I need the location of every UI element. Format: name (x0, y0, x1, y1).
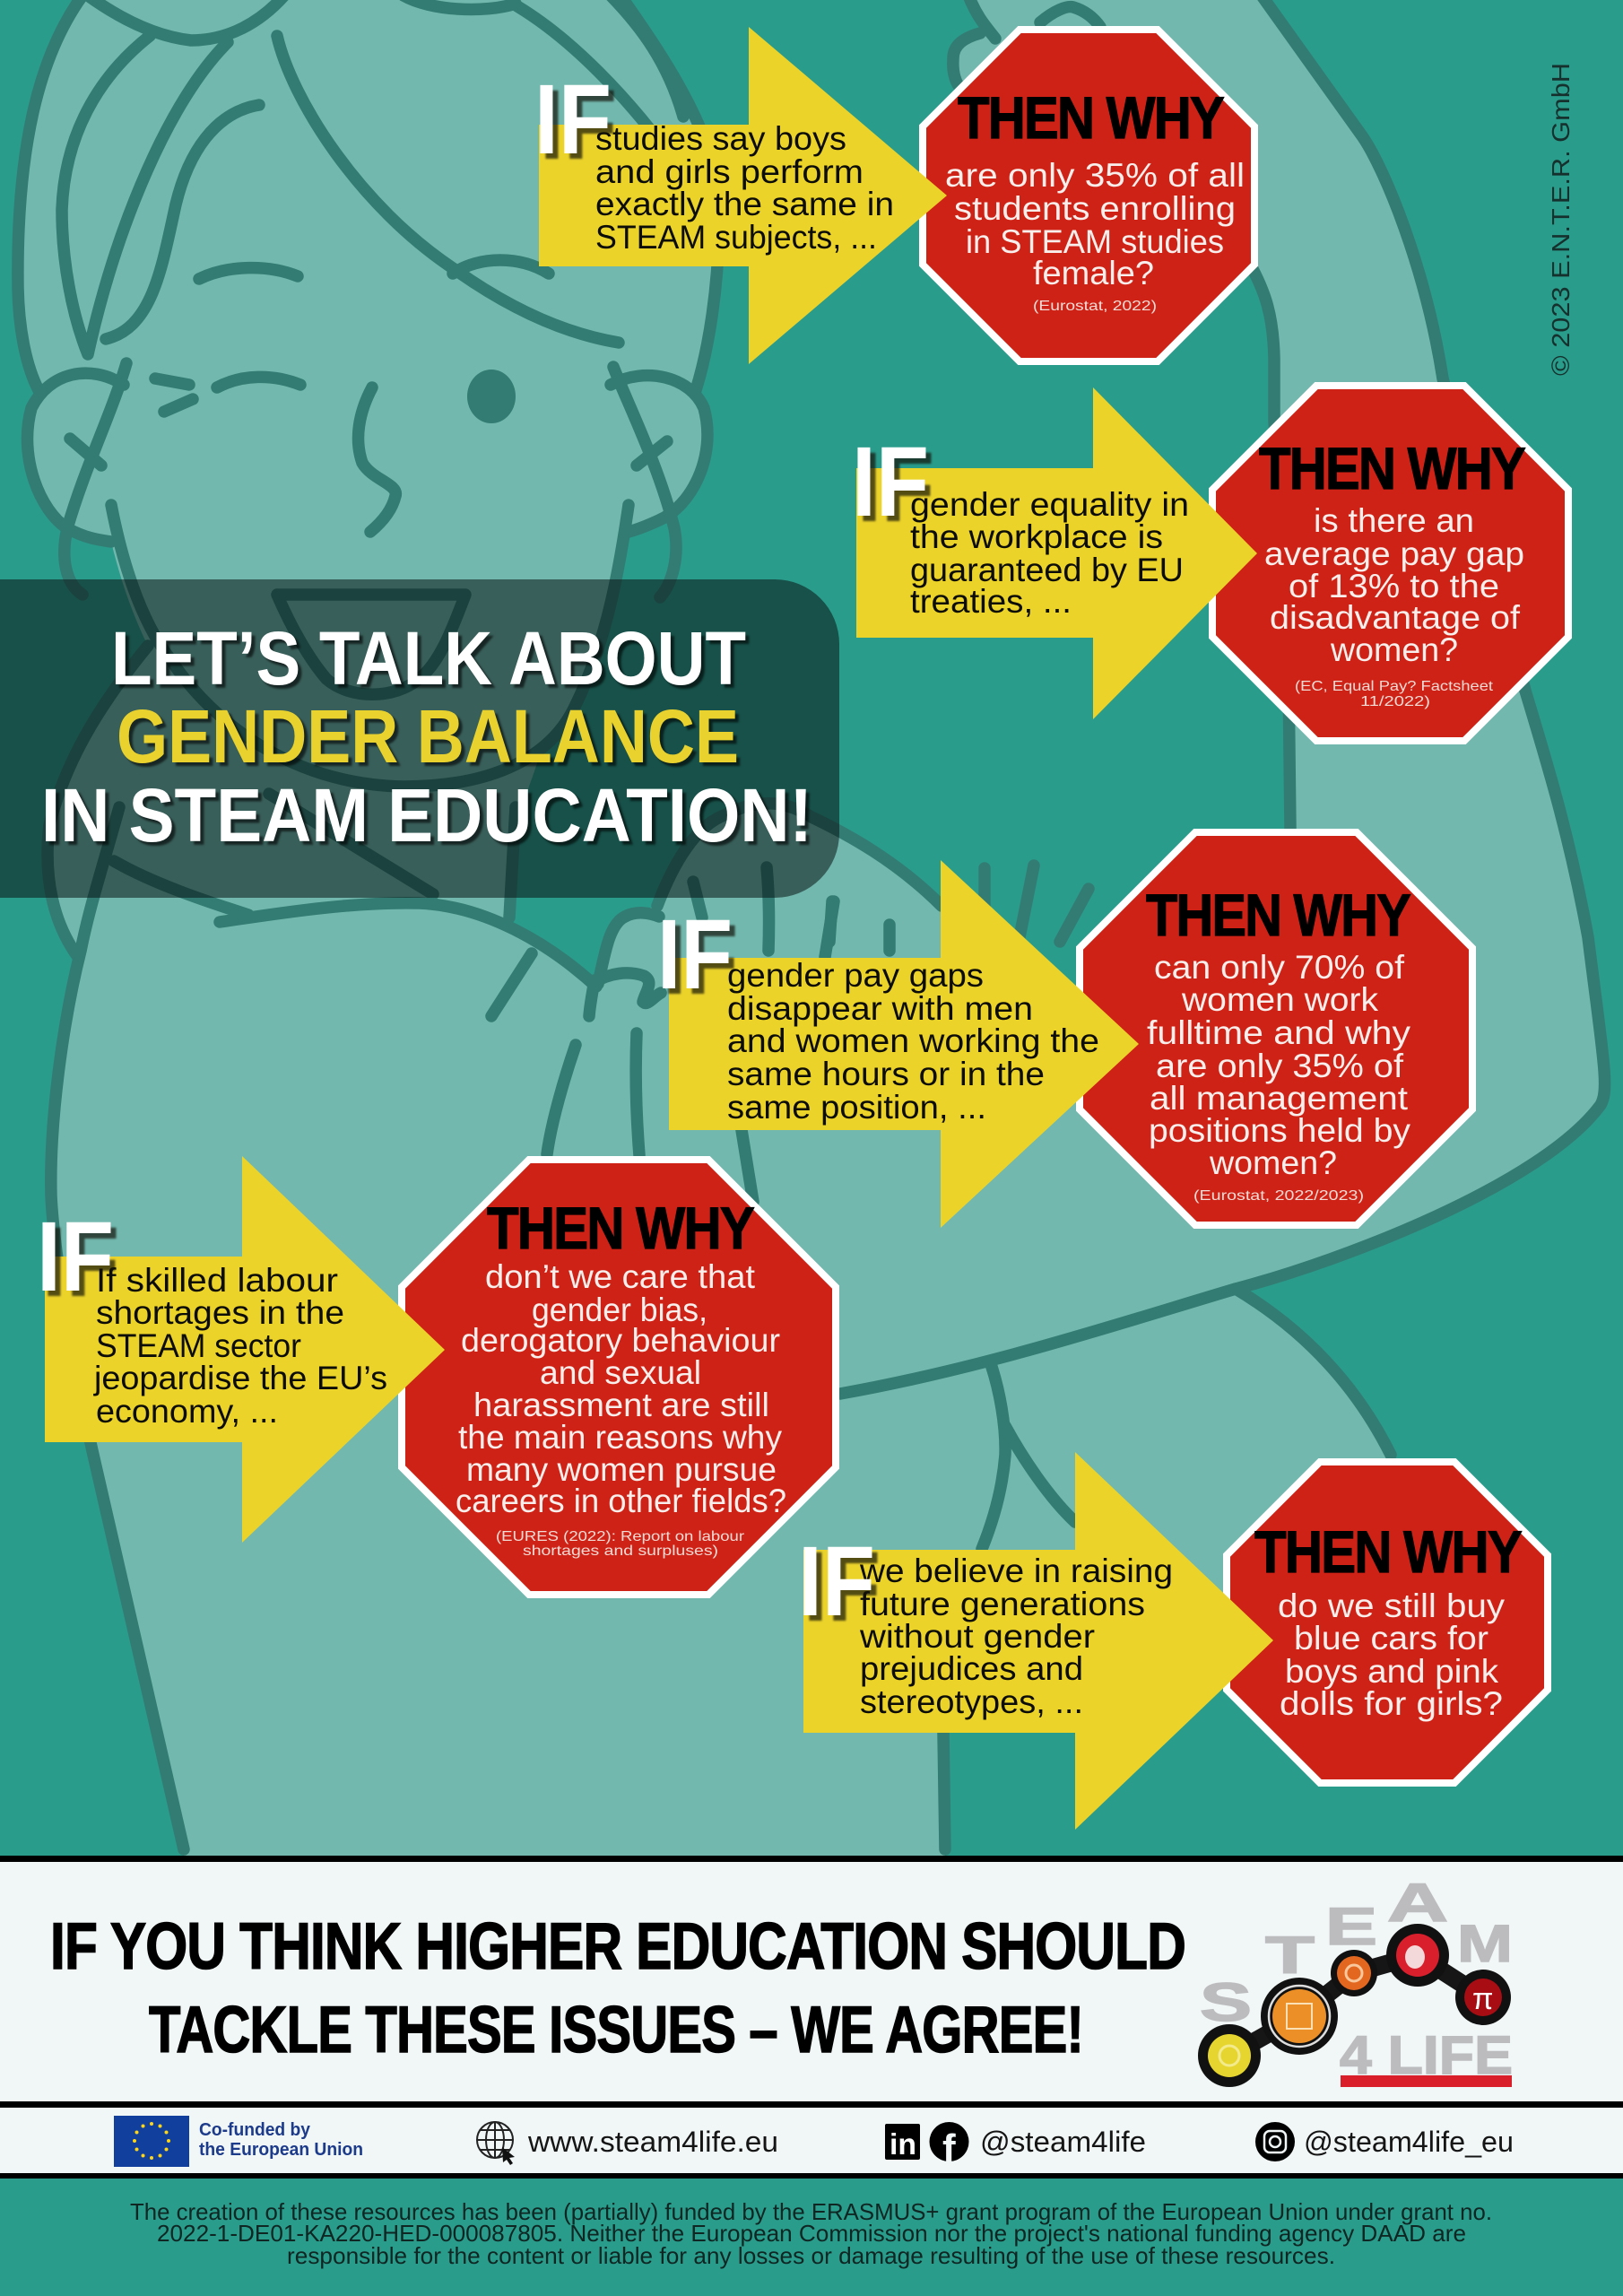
stop sign 3: are only 35% of (1156, 1048, 1404, 1084)
arrow 4: If skilled labour (96, 1262, 338, 1299)
stop sign 5 (1227, 1462, 1548, 1783)
arrow 1: studies say boys (595, 120, 846, 157)
arrow 3: IF (657, 900, 733, 1010)
title text: GENDER BALANCE (117, 694, 739, 778)
website link with globe icon (477, 2122, 778, 2165)
stop sign 3: can only 70% of (1154, 949, 1405, 986)
arrow 3: same position, ... (727, 1089, 986, 1126)
arrow 4: economy, ... (96, 1393, 278, 1430)
arrow 3: disappear with men (727, 990, 1033, 1027)
arrow 2 (852, 387, 1257, 719)
arrow 5: without gender (859, 1618, 1095, 1655)
EU co-funding badge: the European Union (199, 2140, 363, 2160)
EU co-funding badge: Co-funded by (199, 2120, 311, 2140)
stop sign 4: careers in other fields? (456, 1483, 786, 1519)
stop sign 3: fulltime and why (1147, 1014, 1411, 1051)
title text: LET’S TALK ABOUT (111, 616, 746, 700)
stop sign 1: in STEAM studies (966, 223, 1224, 260)
funding disclaimer: The creation of these resources has been (partially) funded by the ERASMUS+ grant program of the European Union under grant no. (130, 2198, 1492, 2225)
logo: STEAM 4 LIFE: S (1200, 1972, 1252, 2032)
stop sign 4: many women pursue (466, 1451, 777, 1488)
call to action text: IF YOU THINK HIGHER EDUCATION SHOULD (50, 1910, 1185, 1983)
stop sign 2: 11/2022) (1360, 694, 1430, 709)
arrow 5 (798, 1452, 1273, 1830)
arrow 5: prejudices and (860, 1650, 1083, 1687)
arrow 3: and women working the (727, 1022, 1099, 1059)
stop sign 5: do we still buy (1278, 1587, 1506, 1624)
stop sign 3: all management (1150, 1080, 1409, 1117)
arrow 4: jeopardise the EU’s (93, 1360, 387, 1396)
stop sign 1: (Eurostat, 2022) (1033, 299, 1157, 314)
stop sign 3: women? (1209, 1144, 1337, 1181)
arrow 2: treaties, ... (910, 583, 1072, 620)
arrow 3 (657, 860, 1139, 1228)
arrow 2: gender equality in (910, 486, 1189, 523)
logo: STEAM 4 LIFE: A (1387, 1873, 1448, 1933)
stop sign 2 (1212, 386, 1568, 741)
arrow 2: guaranteed by EU (910, 552, 1184, 588)
funding disclaimer: 2022-1-DE01-KA220-HED-000087805. Neither the European Commission nor the project's national funding agency DAAD are (157, 2220, 1466, 2247)
call to action text (50, 1910, 1185, 2066)
stop sign 4 (402, 1160, 836, 1595)
hair and head outlines (18, 0, 719, 787)
stop sign 1: are only 35% of all (945, 157, 1245, 194)
stop sign 2: THEN WHY (1259, 435, 1525, 501)
arrow 1: IF (534, 65, 612, 175)
stop sign 4: THEN WHY (487, 1195, 754, 1261)
logo: STEAM 4 LIFE: T (1265, 1926, 1315, 1985)
arrow 1: STEAM subjects, ... (595, 219, 877, 256)
arrow 4: STEAM sector (96, 1327, 301, 1364)
stop sign 4: (EURES (2022): Report on labour (496, 1529, 745, 1544)
arrow 4 (37, 1156, 445, 1543)
website link with globe icon: www.steam4life.eu (527, 2126, 778, 2158)
arrow 5: future generations (860, 1586, 1145, 1622)
stop sign 2: average pay gap (1264, 535, 1524, 572)
statement 2 (852, 386, 1568, 741)
face (155, 260, 549, 694)
funding disclaimer: responsible for the content or liable for any losses or damage resulting of the use of these resources. (287, 2242, 1335, 2269)
arrow 3: gender pay gaps (727, 957, 984, 994)
logo: STEAM 4 LIFE: M (1457, 1915, 1513, 1973)
stop sign 2: (EC, Equal Pay? Factsheet (1295, 679, 1494, 694)
illustration: woman flexing her arm (18, 0, 1605, 1856)
stop sign 2: of 13% to the (1289, 568, 1499, 604)
social: LinkedIn and Facebook (885, 2122, 1146, 2170)
stop sign 5: blue cars for (1294, 1620, 1488, 1657)
statement 4 (37, 1156, 836, 1595)
arrow 4: shortages in the (96, 1294, 344, 1331)
logo: STEAM 4 LIFE: π (1472, 1982, 1493, 2016)
logo: STEAM 4 LIFE: E (1325, 1898, 1377, 1956)
arrow 1 (534, 27, 947, 364)
stop sign 4: and sexual (540, 1354, 701, 1391)
call to action panel (0, 1856, 1623, 2179)
social: LinkedIn and Facebook: in (890, 2127, 916, 2161)
EU co-funding badge (114, 2116, 363, 2167)
arrow 5: we believe in raising (859, 1552, 1173, 1589)
title text: IN STEAM EDUCATION! (41, 773, 812, 857)
arrow 1: exactly the same in (595, 186, 894, 222)
stop sign 2: disadvantage of (1270, 599, 1521, 636)
statement 3 (657, 832, 1472, 1228)
social: LinkedIn and Facebook: @steam4life (980, 2126, 1146, 2158)
stop sign 1: female? (1033, 255, 1154, 291)
stop sign 5: THEN WHY (1254, 1518, 1522, 1585)
arrow 2: the workplace is (910, 518, 1163, 555)
social: Instagram: @steam4life_eu (1304, 2126, 1514, 2158)
funding disclaimer (130, 2198, 1492, 2269)
stop sign 4: harassment are still (473, 1387, 769, 1423)
stop sign 4: derogatory behaviour (461, 1322, 780, 1359)
stop sign 1: students enrolling (954, 190, 1236, 227)
stop sign 1: THEN WHY (958, 84, 1224, 151)
stop sign 4: shortages and surpluses) (523, 1544, 718, 1559)
title text (41, 616, 812, 857)
statement 5 (798, 1452, 1548, 1830)
logo: STEAM 4 LIFE: 4 LIFE (1340, 2025, 1513, 2085)
arrow 5: stereotypes, ... (860, 1683, 1083, 1720)
arrow 2: IF (852, 427, 929, 537)
stop sign 4: don’t we care that (485, 1258, 756, 1295)
social: Instagram (1255, 2122, 1514, 2161)
logo: STEAM 4 LIFE (1198, 1873, 1513, 2087)
stop sign 4: the main reasons why (458, 1419, 782, 1456)
statement 1 (534, 27, 1254, 364)
stop sign 3: positions held by (1149, 1112, 1411, 1149)
social: LinkedIn and Facebook: f (942, 2126, 956, 2170)
stop sign 5: dolls for girls? (1280, 1685, 1503, 1722)
call to action text: TACKLE THESE ISSUES – WE AGREE! (149, 1994, 1083, 2066)
title banner (0, 579, 839, 898)
arrow 4: IF (37, 1202, 114, 1312)
stop sign 5: boys and pink (1285, 1653, 1499, 1690)
arrow 5: IF (798, 1526, 875, 1637)
body, collar and hand outlines (48, 0, 1605, 1849)
arrow 1: and girls perform (595, 153, 864, 190)
stop sign 3 (1080, 832, 1472, 1225)
stop sign 4: gender bias, (532, 1292, 707, 1328)
stop sign 2: is there an (1314, 502, 1474, 539)
arrow 3: same hours or in the (727, 1056, 1045, 1092)
stop sign 3: women work (1181, 981, 1379, 1018)
stop sign 1 (923, 30, 1254, 361)
stop sign 2: women? (1330, 631, 1458, 668)
copyright note: © 2023 E.N.T.E.R. GmbH (1547, 63, 1575, 376)
stop sign 3: THEN WHY (1146, 882, 1410, 948)
stop sign 3: (Eurostat, 2022/2023) (1193, 1188, 1364, 1204)
